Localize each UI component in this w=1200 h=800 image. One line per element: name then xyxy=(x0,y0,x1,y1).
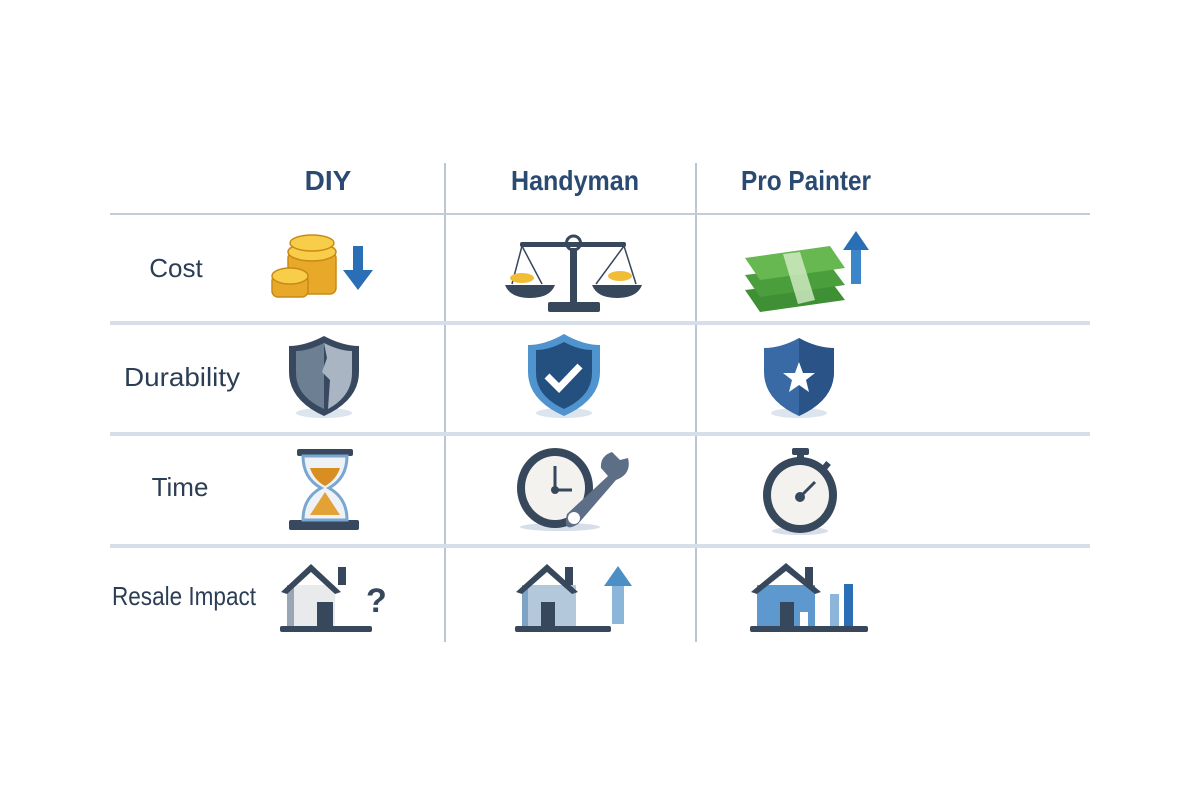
header: Pro Painter: Pro Painter xyxy=(741,165,871,196)
icon: star shield xyxy=(764,338,834,418)
icon: money stack with up arrow xyxy=(745,231,869,312)
icon: house with question mark: ? xyxy=(366,582,387,620)
row label: Durability: Durability xyxy=(124,362,240,392)
icon: house with bar chart xyxy=(750,563,868,632)
icon: check shield xyxy=(528,334,600,418)
header: Handyman: Handyman xyxy=(511,165,639,196)
icon: coins with down arrow xyxy=(272,235,373,297)
row label: Cost: Cost xyxy=(149,253,204,283)
icon: house with up arrow xyxy=(515,564,632,632)
row label: Time: Time xyxy=(152,472,208,502)
header: DIY: DIY xyxy=(305,165,352,196)
row label: Resale Impact: Resale Impact xyxy=(112,581,257,611)
icon: balance scale xyxy=(505,236,642,312)
icon: cracked shield xyxy=(289,336,359,418)
icon: hourglass xyxy=(289,449,359,530)
icon: clock with wrench xyxy=(517,448,629,531)
icon: house with question mark xyxy=(280,564,387,632)
icon: stopwatch xyxy=(763,448,837,535)
